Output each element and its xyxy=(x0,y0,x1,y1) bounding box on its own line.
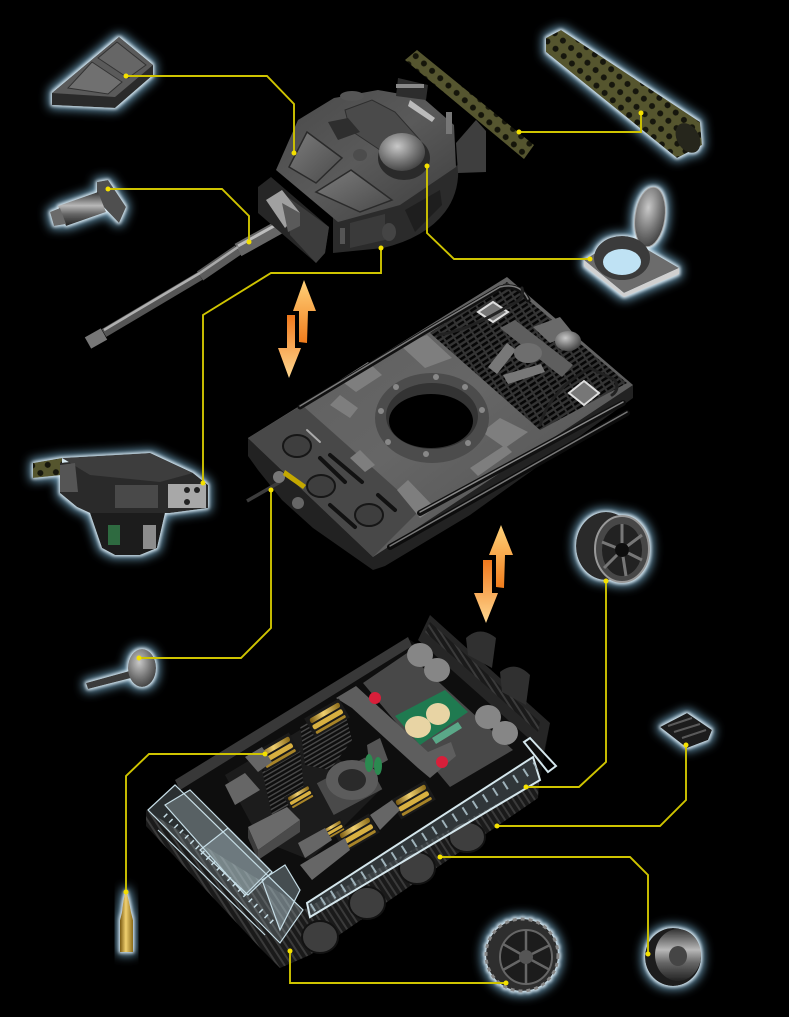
bulkhead beam xyxy=(336,686,456,778)
rear roof fittings xyxy=(328,78,452,161)
part: gun sleeve xyxy=(50,180,126,226)
arrow down xyxy=(278,315,301,378)
part: armor plate xyxy=(52,37,153,108)
hull interior dark xyxy=(175,640,550,910)
part: snorkel tube xyxy=(546,30,706,158)
transparent front frame xyxy=(148,785,303,943)
part: turret basket xyxy=(33,453,208,555)
stacked rack blocks xyxy=(262,712,352,815)
part: machine gun ball xyxy=(86,649,156,689)
part: drive wheel xyxy=(576,512,649,582)
ammo racks xyxy=(254,698,436,853)
tracks xyxy=(146,765,540,968)
turret pivot ring xyxy=(317,757,382,815)
center plating patches xyxy=(330,335,528,518)
gray engine discs xyxy=(407,643,518,745)
rear wall xyxy=(418,615,550,752)
part: sprocket wheel xyxy=(486,919,558,991)
engine bay floor xyxy=(363,653,513,787)
hull wall edge xyxy=(175,637,412,790)
gray transmission block xyxy=(248,807,300,860)
engine deck grills xyxy=(430,282,627,430)
hull edge pipes xyxy=(300,286,627,547)
arrow up xyxy=(293,280,316,343)
deck center details xyxy=(488,317,581,384)
gun barrel xyxy=(88,221,283,343)
turret roof xyxy=(276,90,456,222)
hull machine gun stub xyxy=(247,470,306,509)
right turret box xyxy=(456,120,486,173)
rack gray lids xyxy=(225,747,400,880)
green engine xyxy=(395,690,468,745)
callout leader lines xyxy=(108,76,686,983)
part: road wheel xyxy=(645,928,701,986)
hull plate top face xyxy=(248,277,633,557)
turret lower body xyxy=(333,165,458,253)
hull plate side edge xyxy=(248,385,633,570)
red caps xyxy=(369,692,448,768)
front section xyxy=(248,405,420,557)
callout dots xyxy=(106,74,688,986)
hull top plate xyxy=(247,277,633,570)
snorkel tube on turret xyxy=(405,50,534,159)
up and down arrows lower xyxy=(474,525,513,623)
up and down arrows upper xyxy=(278,280,316,378)
part: track link xyxy=(660,713,712,748)
roof armor panels xyxy=(289,132,392,212)
arrow up lower xyxy=(489,525,513,588)
crew floor xyxy=(225,730,380,860)
road wheels xyxy=(302,822,485,953)
part: cupola hatch xyxy=(584,185,679,297)
engine hatch squares xyxy=(478,302,599,405)
arrow down lower xyxy=(474,560,498,623)
tank turret assembly xyxy=(88,50,534,343)
front hatch circles xyxy=(283,435,383,526)
front side hatch xyxy=(340,190,442,248)
exhaust pipes xyxy=(466,632,530,705)
part: shell xyxy=(120,890,133,952)
turret ring xyxy=(375,373,489,463)
gun mantlet xyxy=(258,177,329,263)
green shells and block xyxy=(365,738,388,775)
front deck hardware xyxy=(307,430,395,527)
lower hull with interior xyxy=(146,615,556,968)
commander cupola xyxy=(378,133,430,180)
transparent side fender xyxy=(307,738,556,917)
